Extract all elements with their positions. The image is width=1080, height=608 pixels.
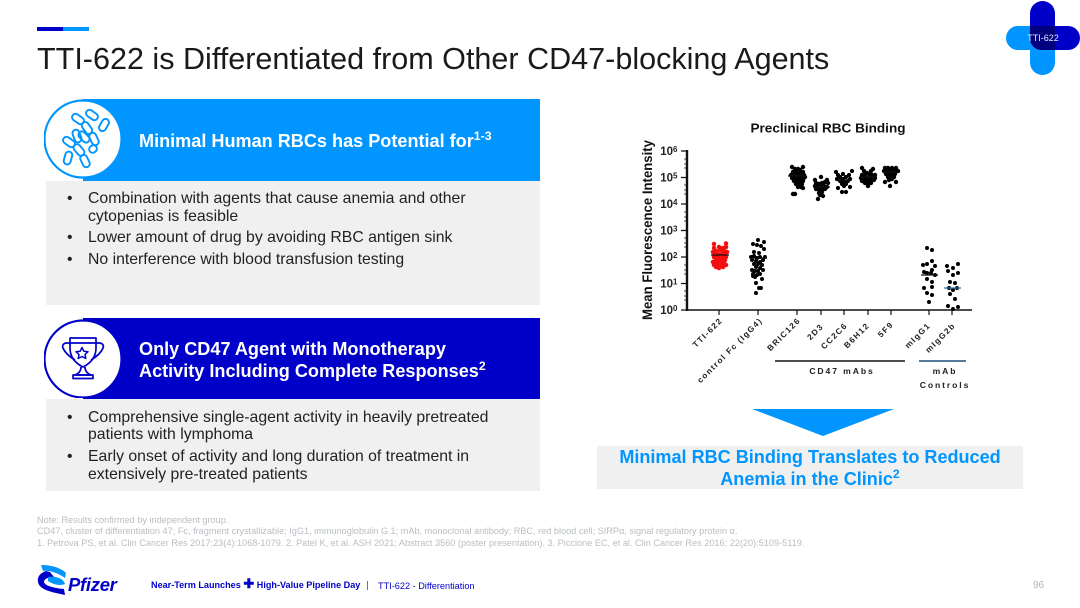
x axis labels: 5F9 bbox=[876, 320, 895, 339]
heading: Activity Including Complete Responses2 bbox=[139, 358, 486, 380]
heading bbox=[139, 339, 486, 381]
footnotes: 1. Petrova PS, et al. Clin Cancer Res 2017;23(4):1068-1079. 2. Patel K, et al. ASH 2021; Abstract 3560 (poster presentation). 3. Piccione EC, et al. Clin Cancer Res 2016; 22(20):5109-5119. bbox=[37, 538, 804, 548]
y axis tick labels: 5 bbox=[673, 172, 678, 180]
x axis labels: BRIC126 bbox=[766, 316, 802, 353]
bullet list: Early onset of activity and long duration of treatment in extensively pre-treated patients bbox=[88, 448, 469, 483]
y axis tick labels: 0 bbox=[673, 304, 678, 313]
footnotes: CD47, cluster of differentiation 47; Fc, fragment crystallizable; IgG1, immunoglobulin G 1; mAb, monoclonal antibody; RBC, red blood cell; SIRPα, signal regulatory protein α. bbox=[37, 526, 738, 536]
x axis labels: mIgG2b bbox=[924, 321, 957, 355]
chart: preclinical RBC binding dot plot bbox=[640, 120, 972, 390]
group labels: CD47 mAbs bbox=[809, 366, 875, 376]
page number: 96 bbox=[1033, 580, 1044, 590]
bullet list bbox=[68, 408, 488, 483]
bullet list bbox=[68, 190, 466, 268]
bullet list: Lower amount of drug by avoiding RBC antigen sink bbox=[88, 229, 452, 246]
data dots: mIgG1 bbox=[923, 248, 935, 302]
data dots: CC2C6 bbox=[836, 171, 852, 192]
bullet list: Combination with agents that cause anemia and other cytopenias is feasible bbox=[88, 190, 466, 225]
panel: minimal human RBCs bbox=[44, 99, 540, 305]
y axis tick labels: 10 bbox=[660, 252, 673, 264]
data dots: BRIC126 bbox=[791, 167, 805, 194]
x axis labels bbox=[691, 316, 957, 385]
data dots: B6H12 bbox=[861, 168, 875, 186]
bullet list: No interference with blood transfusion testing bbox=[88, 251, 404, 268]
panel: monotherapy activity bbox=[44, 318, 540, 491]
x axis labels: TTI-622 bbox=[691, 316, 724, 349]
y axis tick labels: 4 bbox=[673, 198, 678, 207]
icon: trophy bbox=[44, 319, 120, 398]
heading: Minimal Human RBCs has Potential for1-3 bbox=[139, 129, 492, 151]
arrow bbox=[752, 409, 894, 436]
y axis tick labels: 10 bbox=[660, 146, 673, 158]
x axis labels: CC2C6 bbox=[819, 321, 849, 351]
data dots: mIgG2b bbox=[947, 264, 958, 309]
footer event name: Near-Term Launches ✚ High-Value Pipeline Day bbox=[151, 576, 360, 591]
icon: corner plus badge bbox=[1006, 1, 1080, 75]
data dots: 5F9 bbox=[884, 168, 898, 186]
y axis tick labels bbox=[660, 145, 678, 317]
x axis labels: mIgG1 bbox=[903, 321, 932, 350]
footer separator bbox=[367, 581, 368, 590]
callout bbox=[597, 446, 1023, 489]
axes bbox=[681, 150, 972, 315]
group labels: Controls bbox=[920, 380, 970, 390]
footer section name: TTI-622 - Differentiation bbox=[378, 581, 475, 591]
x axis labels: B6H12 bbox=[842, 321, 871, 350]
footnotes: Note: Results confirmed by independent group. bbox=[37, 514, 228, 524]
panel body bbox=[46, 399, 540, 491]
group labels: mAb bbox=[933, 366, 957, 376]
y axis tick labels: 6 bbox=[673, 145, 678, 154]
data dots: 2D3 bbox=[815, 177, 828, 199]
y axis tick labels: 2 bbox=[673, 251, 678, 260]
bullet list: Comprehensive single-agent activity in heavily pretreated patients with lymphoma bbox=[88, 408, 488, 443]
x axis labels: control Fc (IgG4) bbox=[696, 316, 764, 385]
footnotes bbox=[37, 514, 804, 548]
x axis labels: 2D3 bbox=[806, 322, 825, 342]
y axis tick labels: 10 bbox=[660, 305, 673, 317]
median lines bbox=[711, 172, 961, 288]
group brackets bbox=[775, 360, 905, 362]
group labels bbox=[809, 366, 970, 390]
panel header bbox=[83, 99, 540, 181]
heading: Only CD47 Agent with Monotherapy bbox=[139, 339, 446, 359]
callout: Minimal RBC Binding Translates to Reduced bbox=[619, 447, 1001, 467]
logo: Pfizer bbox=[38, 565, 118, 595]
accent bars bbox=[37, 27, 89, 31]
y axis tick labels: 3 bbox=[673, 224, 678, 234]
icon: corner plus badge: TTI-622 bbox=[1027, 33, 1059, 43]
chart title: Preclinical RBC Binding bbox=[750, 120, 906, 136]
y axis label: Mean Fluorescence Intensity bbox=[640, 140, 655, 320]
y axis tick labels: 10 bbox=[660, 172, 673, 184]
title: TTI-622 is Differentiated from Other CD47-blocking Agents bbox=[37, 42, 829, 76]
panel body bbox=[46, 181, 540, 305]
icon: red blood cells bbox=[44, 99, 120, 179]
panel header bbox=[83, 318, 540, 399]
data dots: TTI-622 bbox=[713, 244, 727, 268]
y axis tick labels: 10 bbox=[660, 199, 673, 211]
y axis tick labels: 10 bbox=[660, 226, 673, 238]
y axis tick labels: 10 bbox=[660, 278, 673, 290]
data dots: control Fc bbox=[751, 240, 765, 293]
callout: Anemia in the Clinic2 bbox=[720, 467, 900, 489]
y axis tick labels: 1 bbox=[673, 278, 678, 286]
logo: Pfizer: Pfizer bbox=[68, 574, 117, 595]
